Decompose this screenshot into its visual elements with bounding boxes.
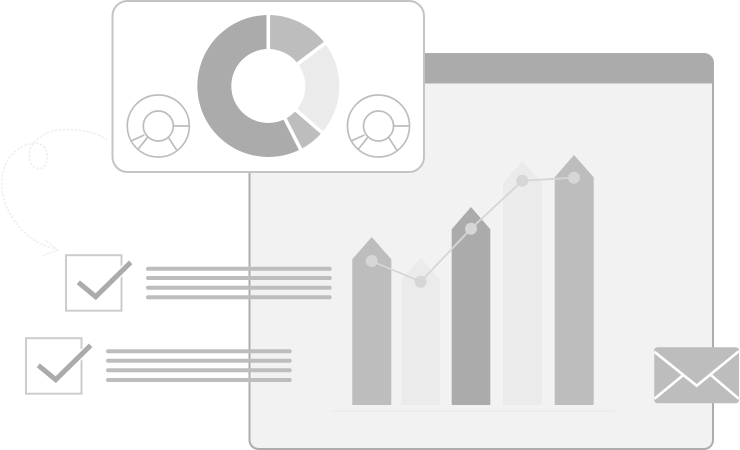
checkbox xyxy=(26,338,82,394)
bar 3 xyxy=(452,207,490,405)
arrow: dashed looping path xyxy=(2,130,107,256)
small donut outline right xyxy=(348,95,410,157)
icon: check mark xyxy=(78,262,131,297)
text lines xyxy=(106,349,292,382)
checklist item 2 xyxy=(26,338,292,394)
bar 5 xyxy=(555,155,594,405)
text lines xyxy=(146,267,332,299)
bar 1 xyxy=(352,237,391,405)
checklist item 1 xyxy=(66,255,332,311)
small donut outline left xyxy=(127,95,189,157)
trend line xyxy=(366,172,580,288)
chart: arrow bars with trend line xyxy=(331,155,615,411)
bar 4 xyxy=(503,161,542,405)
panel: donut charts card xyxy=(112,1,424,172)
panel: browser window xyxy=(250,54,713,449)
bar 2 xyxy=(401,258,440,405)
chart baseline xyxy=(331,410,615,412)
main donut chart xyxy=(197,11,339,157)
icon: check mark xyxy=(38,345,91,380)
window title bar xyxy=(250,54,713,83)
icon: envelope xyxy=(654,347,739,403)
checkbox xyxy=(66,255,122,311)
